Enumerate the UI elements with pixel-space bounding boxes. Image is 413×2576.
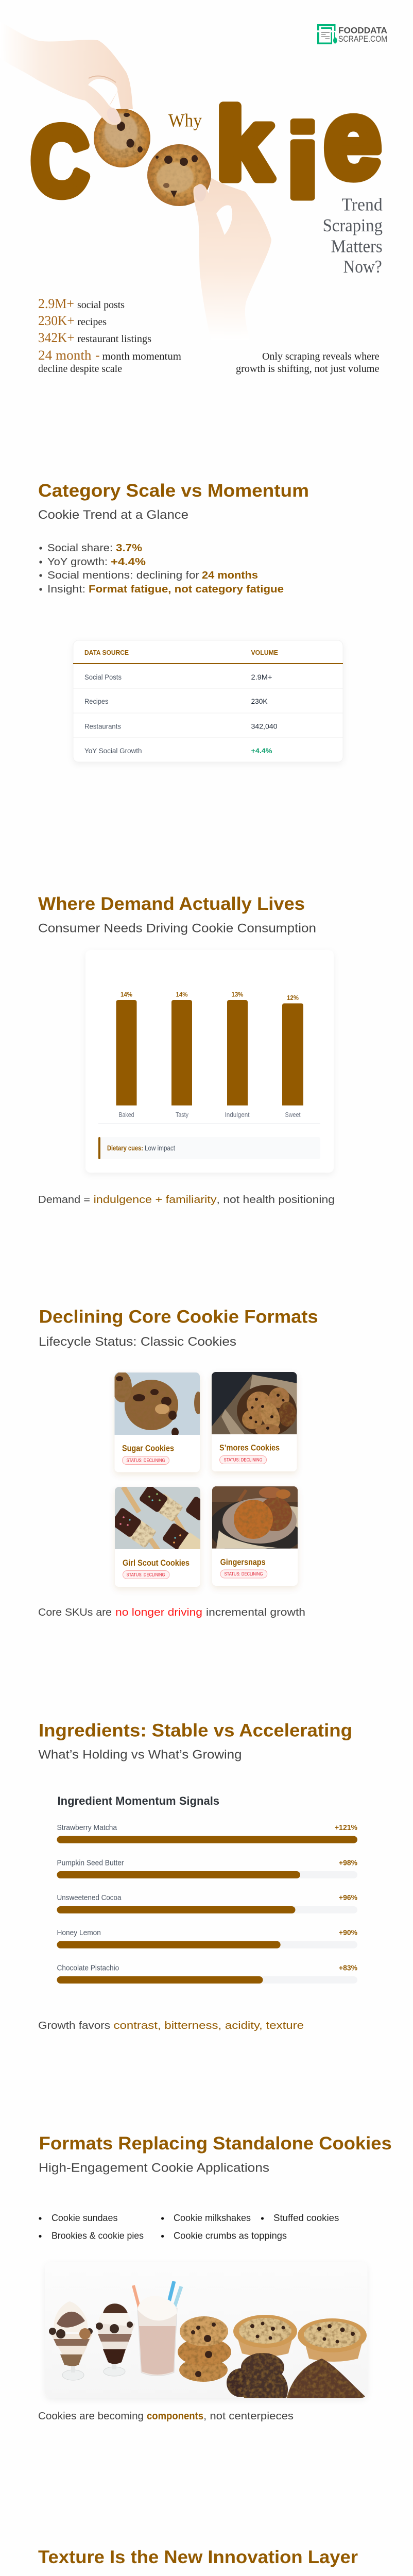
takeaway: core skus: Core SKUs are bbox=[38, 1607, 112, 1618]
takeaway: growth favors: contrast, bitterness, acidity, texture bbox=[113, 2020, 304, 2031]
data table bbox=[73, 640, 343, 762]
fat letter i: i bbox=[285, 103, 320, 221]
title remainder: Scraping bbox=[323, 215, 383, 235]
top cookie (first o) bbox=[94, 109, 150, 167]
bar: chocolate pistachio: +83% bbox=[339, 1964, 357, 1972]
bullet list: 3.7% bbox=[116, 543, 142, 554]
data table: 342,040 bbox=[251, 722, 278, 731]
callout: dietary cues: Low impact bbox=[145, 1144, 175, 1152]
brand logo top right: SCRAPE.COM bbox=[338, 34, 387, 44]
takeaway: components: , not centerpieces bbox=[203, 2411, 294, 2422]
title remainder bbox=[323, 195, 383, 277]
card: gingersnaps: Gingersnaps bbox=[220, 1557, 266, 1567]
heading: Category Scale vs Momentum bbox=[38, 481, 309, 501]
takeaway: core skus bbox=[38, 1607, 305, 1618]
card: s'mores cookies: S’mores Cookies bbox=[219, 1443, 280, 1452]
takeaway: demand: indulgence + familiarity bbox=[94, 1194, 217, 1206]
card: sugar cookies bbox=[112, 1371, 202, 1472]
bullet list: Insight: bbox=[47, 584, 85, 595]
hero takeaway: Only scraping reveals where bbox=[262, 351, 380, 362]
bar chart: Tasty bbox=[176, 1111, 188, 1118]
bar: unsweetened cocoa: +96% bbox=[339, 1893, 357, 1902]
subheading: High-Engagement Cookie Applications bbox=[39, 2161, 269, 2175]
takeaway: demand: Demand = bbox=[38, 1194, 90, 1206]
takeaway: components: components bbox=[147, 2411, 203, 2422]
hero takeaway bbox=[236, 351, 380, 375]
brand logo top right bbox=[317, 24, 387, 44]
card: girl scout cookies: STATUS: DECLINING bbox=[127, 1572, 165, 1578]
bar: pumpkin seed butter bbox=[57, 1858, 357, 1878]
bar: unsweetened cocoa bbox=[57, 1893, 357, 1913]
subheading: Lifecycle Status: Classic Cookies bbox=[39, 1335, 236, 1349]
bottom cookie (second o) bbox=[147, 144, 211, 206]
fat letter C: C bbox=[31, 106, 89, 215]
data table: Restaurants bbox=[84, 722, 121, 731]
brand logo top right: FOODDATA bbox=[338, 26, 387, 35]
takeaway: core skus: incremental growth bbox=[206, 1607, 305, 1618]
hero section bbox=[0, 22, 387, 375]
card: sugar cookies: Sugar Cookies bbox=[122, 1444, 174, 1453]
card: gingersnaps: STATUS: DECLINING bbox=[225, 1571, 263, 1577]
bar chart: Sweet bbox=[285, 1111, 301, 1118]
hero stats list: 24 month bbox=[38, 348, 92, 363]
format bullet list: Stuffed cookies bbox=[273, 2213, 339, 2223]
card: gingersnaps bbox=[209, 1486, 306, 1586]
hero takeaway: growth is shifting, not just volume bbox=[236, 363, 380, 375]
hand holding bottom cookie bbox=[193, 178, 271, 340]
format bullet list: Cookie sundaes bbox=[51, 2213, 117, 2223]
section: declining core cookie formats bbox=[38, 1307, 318, 1618]
bullet list: 24 months bbox=[202, 570, 258, 581]
data table: 230K bbox=[251, 697, 268, 705]
takeaway: demand bbox=[38, 1194, 335, 1206]
bar: pumpkin seed butter: Pumpkin Seed Butter bbox=[57, 1858, 124, 1867]
takeaway: demand: , not health positioning bbox=[216, 1194, 335, 1206]
bar: honey lemon: Honey Lemon bbox=[57, 1928, 101, 1937]
cookie stack bbox=[178, 2316, 231, 2382]
bar chart: 13% bbox=[232, 990, 244, 998]
title remainder: Trend bbox=[341, 195, 383, 215]
chocolate cookies and crumbs bbox=[227, 2353, 365, 2398]
data table: VOLUME bbox=[251, 649, 278, 656]
bullet list: +4.4% bbox=[111, 556, 146, 568]
hero stats list bbox=[38, 296, 181, 375]
bullet list: Social mentions: declining for bbox=[47, 570, 199, 581]
panel: bar chart card bbox=[85, 950, 334, 1173]
section: ingredients bbox=[38, 1721, 357, 2031]
heading: Declining Core Cookie Formats bbox=[39, 1307, 318, 1327]
subheading: Cookie Trend at a Glance bbox=[38, 508, 188, 522]
takeaway: components bbox=[38, 2411, 294, 2422]
heading: Where Demand Actually Lives bbox=[38, 894, 305, 914]
takeaway: components: Cookies are becoming bbox=[38, 2411, 144, 2422]
hand holding top cookie bbox=[0, 22, 133, 125]
card: sugar cookies: STATUS: DECLINING bbox=[127, 1458, 165, 1464]
section: formats replacing standalone cookies bbox=[38, 2133, 392, 2422]
card: s'mores cookies bbox=[211, 1372, 297, 1471]
hero stats list: restaurant listings bbox=[77, 333, 151, 345]
milkshake bbox=[133, 2281, 181, 2376]
hero stats list: 230K+ bbox=[38, 313, 75, 328]
title word Why: Why bbox=[168, 110, 202, 131]
bar chart: 14% bbox=[121, 990, 132, 998]
fat letter k: k bbox=[216, 88, 272, 200]
bar: chocolate pistachio: Chocolate Pistachio bbox=[57, 1964, 119, 1972]
hero stats list: month momentum bbox=[102, 351, 181, 362]
card: girl scout cookies bbox=[110, 1484, 211, 1587]
section: where demand lives bbox=[38, 894, 335, 1206]
format bullet list: Cookie milkshakes bbox=[174, 2213, 251, 2223]
chart title: Ingredient Momentum Signals bbox=[58, 1794, 219, 1807]
title remainder: Matters bbox=[331, 236, 383, 256]
sundae two bbox=[95, 2303, 135, 2376]
bar: strawberry matcha bbox=[57, 1823, 357, 1843]
fat letter e: e bbox=[324, 77, 381, 201]
bar chart bbox=[98, 990, 320, 1124]
subheading: What’s Holding vs What’s Growing bbox=[38, 1748, 242, 1762]
bullet list: YoY growth: bbox=[47, 556, 108, 568]
subheading: Consumer Needs Driving Cookie Consumption bbox=[38, 921, 316, 936]
bar: strawberry matcha: +121% bbox=[335, 1823, 357, 1832]
hero stats list: - bbox=[95, 348, 100, 363]
hero stats list: 2.9M+ bbox=[38, 296, 74, 311]
format bullet list bbox=[39, 2213, 339, 2241]
heading: Formats Replacing Standalone Cookies bbox=[39, 2133, 392, 2154]
bar: chocolate pistachio bbox=[57, 1964, 357, 1984]
data table: +4.4% bbox=[251, 747, 272, 755]
callout: dietary cues bbox=[98, 1137, 320, 1159]
data table: Social Posts bbox=[84, 673, 122, 681]
takeaway: growth favors: Growth favors bbox=[38, 2020, 110, 2031]
hero stats list: decline despite scale bbox=[38, 363, 122, 375]
data table: YoY Social Growth bbox=[84, 747, 142, 755]
format bullet list: Brookies & cookie pies bbox=[51, 2231, 144, 2241]
bar: unsweetened cocoa: Unsweetened Cocoa bbox=[57, 1893, 122, 1902]
hero stats list: 342K+ bbox=[38, 330, 75, 345]
takeaway: core skus: no longer driving bbox=[115, 1607, 202, 1618]
progress bars chart bbox=[57, 1823, 357, 1984]
bar: pumpkin seed butter: +98% bbox=[339, 1858, 357, 1867]
panel: desserts illustration bbox=[45, 2281, 368, 2400]
card: s'mores cookies: STATUS: DECLINING bbox=[223, 1458, 263, 1463]
bar: strawberry matcha: Strawberry Matcha bbox=[57, 1823, 117, 1832]
format bullet list: Cookie crumbs as toppings bbox=[174, 2231, 287, 2241]
section: category scale vs momentum bbox=[38, 481, 343, 762]
bullet list: Format fatigue, not category fatigue bbox=[89, 584, 284, 595]
data table: Recipes bbox=[84, 697, 108, 705]
bar chart: 14% bbox=[176, 990, 188, 998]
data table: DATA SOURCE bbox=[84, 649, 129, 656]
bar chart: Indulgent bbox=[225, 1111, 250, 1118]
takeaway: growth favors bbox=[38, 2020, 304, 2031]
bar chart: 12% bbox=[287, 994, 299, 1002]
hero stats list: social posts bbox=[77, 299, 125, 311]
bullet list bbox=[39, 543, 284, 595]
bar chart: Baked bbox=[118, 1111, 134, 1118]
card: girl scout cookies: Girl Scout Cookies bbox=[123, 1558, 190, 1568]
bullet list: Social share: bbox=[47, 543, 113, 554]
callout: dietary cues: Dietary cues: bbox=[107, 1144, 143, 1152]
cookie pies bbox=[233, 2315, 367, 2362]
heading: Texture Is the New Innovation Layer bbox=[38, 2547, 358, 2567]
bar: honey lemon: +90% bbox=[339, 1928, 357, 1937]
heading: Ingredients: Stable vs Accelerating bbox=[39, 1721, 352, 1741]
title remainder: Now? bbox=[343, 257, 382, 277]
sundae one bbox=[49, 2301, 93, 2380]
section: texture bbox=[38, 2550, 357, 2567]
hero stats list: recipes bbox=[77, 316, 107, 328]
data table: 2.9M+ bbox=[251, 673, 272, 681]
bar: honey lemon bbox=[57, 1928, 357, 1948]
